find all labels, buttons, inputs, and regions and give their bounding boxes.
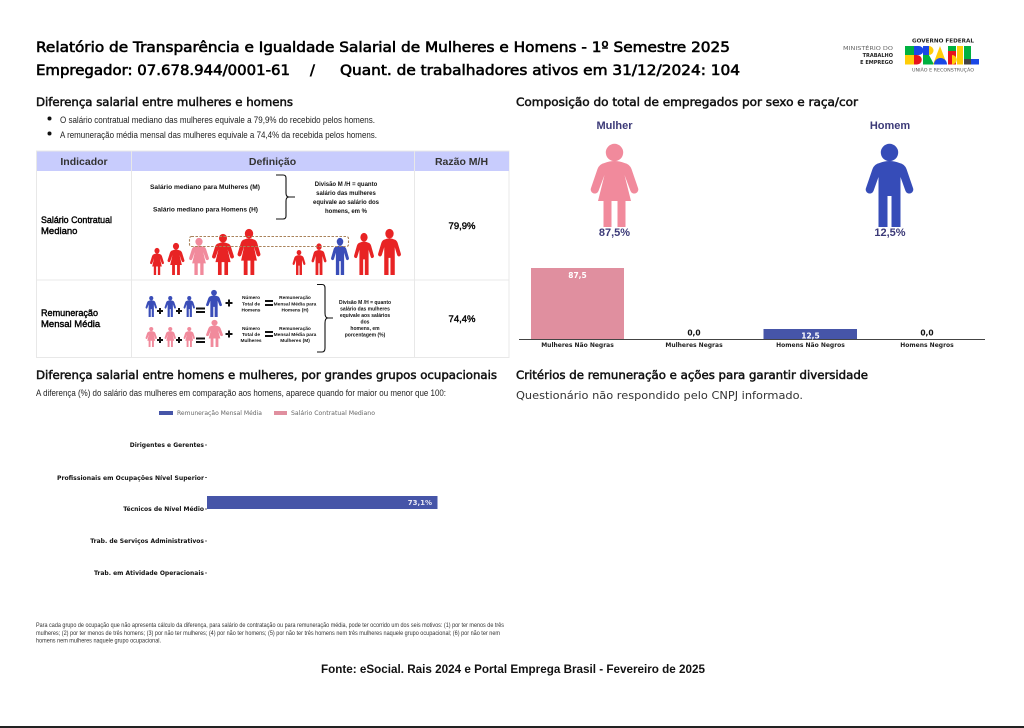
footnote (36, 623, 504, 644)
bar chart: grupos ocupacionais: Trab. de Serviços Administrativos (90, 538, 204, 545)
logo: ministério: E EMPREGO (860, 60, 893, 66)
definition: remuneração, homens: Homens (242, 308, 261, 314)
bar chart: sexo e raça: 12,5 (801, 332, 820, 340)
legend (159, 410, 375, 417)
pictogram: mulher: 87,5% (599, 227, 630, 239)
definition: remuneração, mulheres (146, 320, 317, 347)
legend: Salário Contratual Mediano (291, 410, 375, 417)
table header: Razão M/H (435, 156, 488, 168)
definition: remuneração, homens: Homens (H) (282, 308, 309, 314)
legend: Remuneração Mensal Média (177, 410, 262, 417)
logo: ministério: MINISTÉRIO DO (843, 44, 893, 52)
bottom bar (0, 726, 1024, 728)
logo: governo federal brasil: GOVERNO FEDERAL (912, 38, 975, 44)
bar chart: sexo e raça (519, 268, 985, 349)
bar chart: sexo e raça: Homens Não Negros (776, 342, 845, 349)
pictogram: homem (866, 120, 913, 239)
footnote: homens nem mulheres naquele grupo ocupacional. (36, 638, 161, 644)
report title (36, 40, 740, 79)
logo: governo federal brasil (905, 38, 979, 72)
brace and division note: salário das mulheres (340, 306, 390, 312)
bar chart: grupos ocupacionais: Profissionais em Ocupações Nível Superior (57, 475, 204, 482)
brace and division note: equivale aos salários (340, 313, 390, 319)
table header: Indicador (60, 156, 108, 168)
brace and division note: homens, em (350, 326, 380, 332)
brace and division note: porcentagem (%) (345, 332, 386, 338)
bar chart: grupos ocupacionais: 73,1% (408, 499, 432, 507)
bar chart: grupos ocupacionais (57, 442, 438, 577)
bullet list: A remuneração média mensal das mulheres equivale a 74,4% da recebida pelos homens. (60, 130, 377, 140)
table header: Definição (249, 156, 296, 168)
footnote: Para cada grupo de ocupação que não apresenta cálculo da diferença, para salário de contratação ou para remuneração média, pode ter ocorrido um dos seis motivos: (1) por ter menos de três (36, 623, 504, 629)
definition: remuneração, homens: Número (242, 295, 260, 301)
footnote: mulheres; (2) por ter menos de três homens; (3) por não ter mulheres; (4) por não ter homens; (5) por não ter três homens nem três mulheres naquele grupo ocupacional; (6) por não ter nem (36, 631, 500, 637)
definition: salário mediano (150, 175, 380, 219)
bar chart: sexo e raça: Mulheres Negras (665, 342, 723, 349)
definition: remuneração, mulheres: Total de (242, 332, 260, 338)
source: Fonte: eSocial. Rais 2024 e Portal Emprega Brasil - Fevereiro de 2025 (321, 662, 705, 676)
row label: salário contratual mediano (41, 215, 112, 237)
definition: salário mediano: Divisão M /H = quanto (315, 182, 378, 188)
logo: ministério (843, 44, 893, 66)
logo: governo federal brasil: UNIÃO E RECONSTRUÇÃO (912, 68, 975, 72)
bar chart: grupos ocupacionais: Trab. em Atividade Operacionais (94, 570, 204, 577)
bar chart: sexo e raça: Homens Negros (900, 342, 954, 349)
report title: Empregador: 07.678.944/0001-61 (36, 63, 290, 79)
definition: salário mediano: Salário mediano para Mulheres (M) (150, 185, 260, 191)
table: indicadores (36, 151, 509, 358)
heading: grupos ocupacionais: Diferença salarial entre homens e mulheres, por grandes grupos ocupacionais (36, 368, 497, 382)
pictogram: mulher (591, 120, 638, 239)
subtitle: grupos ocupacionais: A diferença (%) do salário das mulheres em comparação aos homens, aparece quando for maior ou menor que 100: (36, 388, 446, 398)
icons: fila de medianas (150, 229, 401, 275)
bar chart: grupos ocupacionais: Dirigentes e Gerentes (130, 442, 204, 449)
bar chart: sexo e raça: 87,5 (568, 271, 587, 280)
bullet list: O salário contratual mediano das mulheres equivale a 79,9% do recebido pelos homens. (60, 115, 375, 125)
brace and division note: dos (361, 320, 370, 326)
bullet list (48, 115, 377, 140)
row label: salário contratual mediano: Salário Contratual (41, 215, 112, 226)
definition: remuneração, homens: Mensal Média para (274, 302, 317, 308)
report title: / (310, 63, 315, 79)
definition: remuneração, homens: Remuneração (279, 295, 311, 301)
definition: remuneração, homens: Total de (242, 302, 260, 308)
row label: salário contratual mediano: Mediano (41, 226, 77, 237)
report title: Quant. de trabalhadores ativos em 31/12/2024: 104 (340, 63, 740, 79)
definition: salário mediano: equivale ao salário dos (313, 200, 380, 206)
heading: diferença salarial: Diferença salarial entre mulheres e homens (36, 95, 293, 109)
value: 79,9%: 79,9% (449, 221, 476, 232)
definition: salário mediano: Salário mediano para Homens (H) (153, 208, 258, 214)
bar chart: sexo e raça: 0,0 (920, 328, 934, 338)
definition: remuneração, homens (146, 290, 317, 317)
questionnaire note: Questionário não respondido pelo CNPJ informado. (516, 389, 803, 402)
report title: Relatório de Transparência e Igualdade Salarial de Mulheres e Homens - 1º Semestre 2025 (36, 40, 730, 56)
pictogram: homem: 12,5% (874, 227, 906, 239)
logo: ministério: TRABALHO (863, 53, 893, 59)
row label: remuneração mensal média (41, 308, 101, 330)
pictogram: homem: Homem (870, 120, 910, 132)
brace and division note: Divisão M /H = quanto (339, 300, 391, 306)
heading: composição: Composição do total de empregados por sexo e raça/cor (516, 95, 858, 109)
heading: critérios: Critérios de remuneração e ações para garantir diversidade (516, 368, 868, 382)
table header (37, 152, 509, 171)
definition: salário mediano: salário das mulheres (316, 191, 377, 197)
definition: salário mediano: homens, em % (325, 209, 368, 215)
bar chart: sexo e raça: Mulheres Não Negras (541, 342, 614, 349)
bar chart: sexo e raça: 0,0 (687, 328, 701, 338)
row label: remuneração mensal média: Mensal Média (41, 319, 101, 330)
definition: remuneração, mulheres: Remuneração (279, 326, 311, 332)
pictogram: mulher: Mulher (596, 120, 633, 132)
bar chart: grupos ocupacionais: Técnicos de Nível Médio (123, 506, 204, 513)
definition: remuneração, mulheres: Mensal Média para (274, 332, 317, 338)
definition: remuneração, mulheres: Número (242, 326, 260, 332)
value: 74,4%: 74,4% (449, 314, 476, 325)
definition: remuneração, mulheres: Mulheres (M) (280, 338, 310, 344)
definition: remuneração, mulheres: Mulheres (240, 338, 262, 344)
row label: remuneração mensal média: Remuneração (41, 308, 98, 319)
brace and division note (317, 284, 391, 352)
